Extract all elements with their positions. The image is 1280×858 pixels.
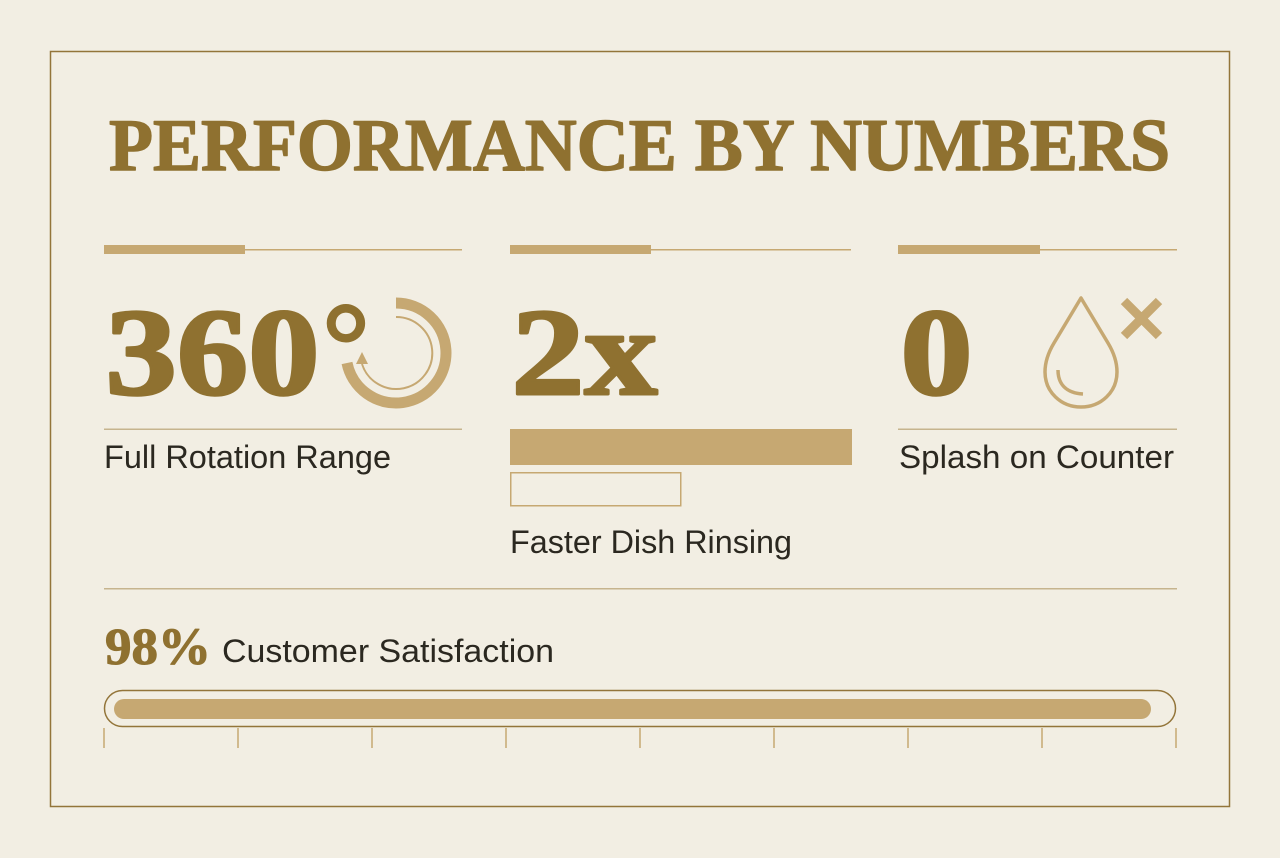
progress track	[104, 690, 1176, 726]
icon: rotation ring with arrow	[347, 303, 446, 403]
section divider	[104, 588, 1177, 590]
panel header rule	[104, 245, 462, 254]
stat: 360 degrees	[106, 278, 370, 421]
panel: customer satisfaction	[104, 619, 1176, 748]
divider	[898, 428, 1177, 430]
label: Faster Dish Rinsing	[510, 524, 792, 560]
comparison bar: faster	[510, 429, 852, 465]
panel: splash on counter	[898, 245, 1177, 475]
panel header rule	[898, 245, 1177, 254]
scale ticks	[104, 728, 1176, 748]
title: PERFORMANCE BY NUMBERS	[109, 105, 1170, 187]
stat: zero: 0	[900, 284, 972, 421]
divider	[104, 428, 462, 430]
progress fill	[114, 699, 1151, 719]
stat: 360 degrees: 360	[106, 284, 320, 421]
label: Customer Satisfaction	[222, 633, 554, 669]
label: Full Rotation Range	[104, 439, 391, 475]
comparison bar: baseline	[511, 473, 681, 506]
stat: 360 degrees: °	[322, 278, 370, 411]
label: Splash on Counter	[899, 439, 1174, 475]
icon: water drop with cross	[1045, 298, 1159, 407]
panel: faster dish rinsing	[510, 245, 852, 560]
panel header rule	[510, 245, 851, 254]
stat: 98 percent: 98%	[105, 619, 211, 676]
panel: full rotation range	[104, 245, 462, 475]
stat: 2x: 2x	[512, 284, 658, 421]
